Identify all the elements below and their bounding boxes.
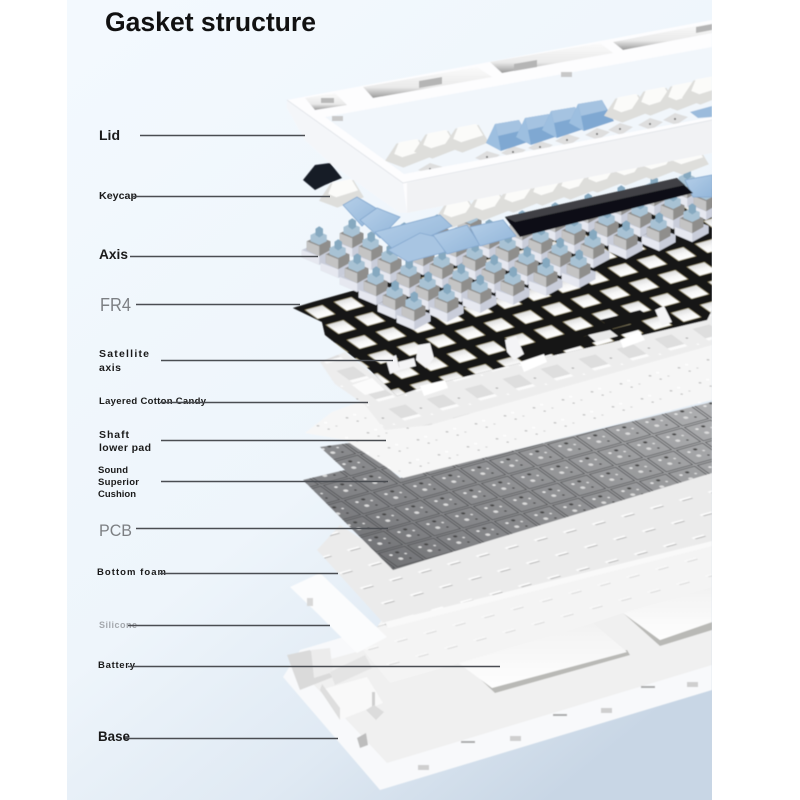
label: Shaft lower pad: lower pad (99, 442, 151, 454)
label: Satellite axis (99, 348, 393, 374)
title: Gasket structure (105, 7, 316, 37)
label: Lid: Lid (99, 127, 120, 143)
silicone layer (290, 500, 712, 683)
label: Sound Superior Cushion: Superior (98, 477, 139, 488)
label: Sound Superior Cushion: Sound (98, 465, 128, 476)
base case (283, 560, 712, 790)
keycaps seen through lid (385, 76, 727, 175)
keyboard exploded diagram (283, 20, 727, 790)
label: Sound Superior Cushion: Cushion (98, 489, 136, 500)
switches (axis) (302, 168, 722, 330)
label: Bottom foam: Bottom foam (97, 567, 166, 578)
sound superior cushion / shaft lower pad (305, 300, 712, 478)
label: Battery: Battery (98, 660, 136, 671)
batteries (457, 587, 712, 693)
layered cotton candy (320, 305, 712, 430)
label: Sound Superior Cushion (98, 465, 388, 500)
label: Shaft lower pad: Shaft (99, 429, 130, 441)
lid (287, 20, 712, 213)
black corner keycap (303, 163, 342, 190)
label: Shaft lower pad (99, 429, 386, 454)
satellite axis clips (386, 306, 672, 374)
label: Keycap: Keycap (99, 190, 137, 202)
FR4 plate (293, 190, 712, 396)
label: Silicone: Silicone (99, 620, 137, 630)
label: PCB: PCB (99, 521, 132, 540)
right margin (712, 0, 800, 800)
black space bar keycap (505, 178, 693, 237)
bottom foam (317, 460, 712, 628)
label: Base: Base (98, 728, 130, 744)
label: Axis: Axis (99, 246, 128, 262)
PCB (303, 402, 712, 570)
front white keycaps (319, 146, 709, 228)
label: Satellite axis: axis (99, 362, 121, 374)
label: Satellite axis: Satellite (99, 348, 149, 360)
label: Layered Cotton Candy: Layered Cotton Candy (99, 396, 207, 407)
front blue keycaps (343, 175, 712, 262)
label: FR4: FR4 (100, 295, 131, 315)
